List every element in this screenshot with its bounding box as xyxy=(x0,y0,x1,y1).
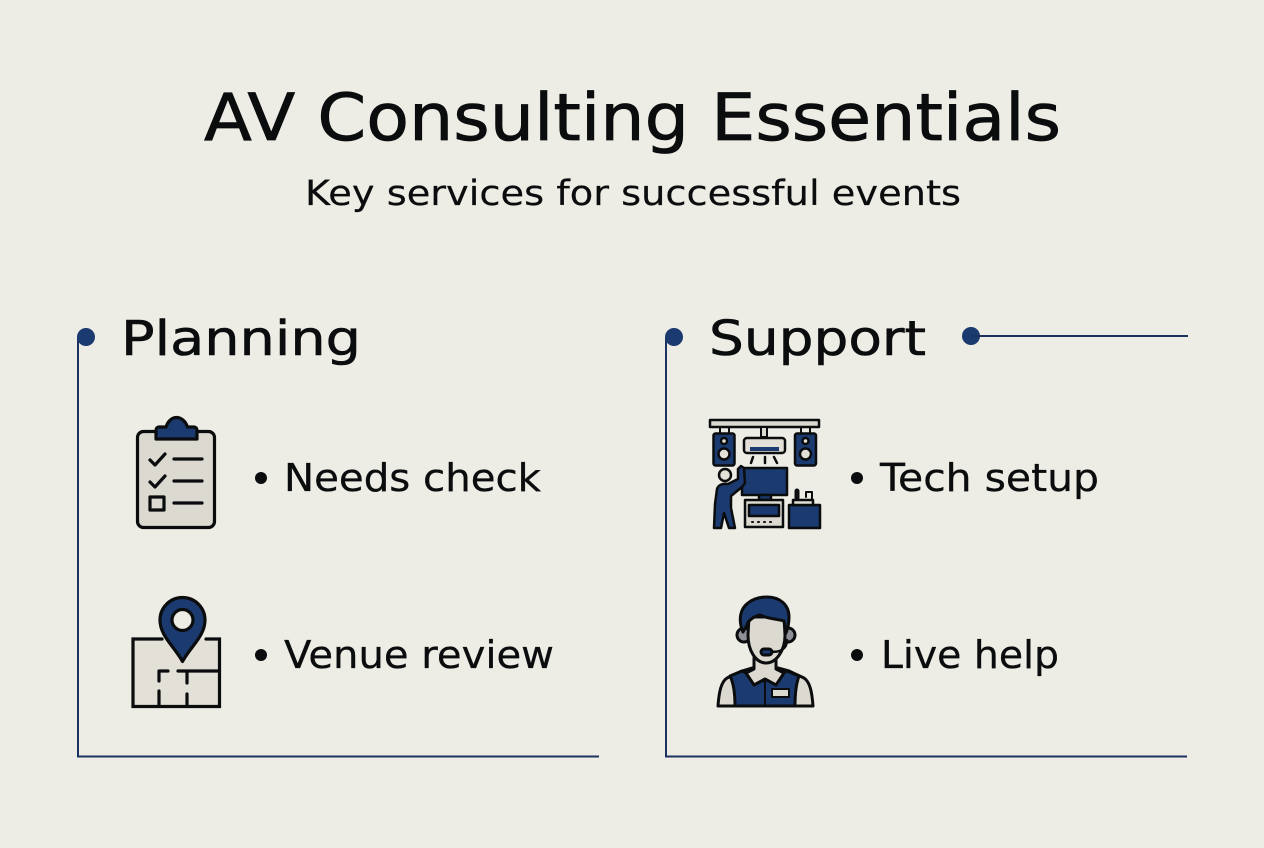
subtitle: Key services for successful events xyxy=(305,174,961,214)
marker dot: planning xyxy=(77,328,95,346)
bullet: venue review xyxy=(255,649,267,661)
bullet: needs check xyxy=(255,472,267,484)
label: needs check: Needs check xyxy=(284,456,541,500)
panel: planning xyxy=(77,311,599,756)
marker dot: support xyxy=(665,328,683,346)
label: live help: Live help xyxy=(881,633,1059,677)
bullet: live help xyxy=(851,649,863,661)
panel: support xyxy=(665,311,1188,756)
icon: tech setup xyxy=(710,420,820,528)
panel frame: support xyxy=(666,337,1187,756)
icon: live help agent xyxy=(718,597,813,706)
connector line with dot xyxy=(962,327,1188,345)
bullet: tech setup xyxy=(851,472,863,484)
label: venue review: Venue review xyxy=(284,633,554,677)
heading: planning: Planning xyxy=(121,311,361,367)
panel frame: planning xyxy=(78,337,599,756)
label: tech setup: Tech setup xyxy=(879,456,1099,500)
title: AV Consulting Essentials xyxy=(204,81,1061,156)
heading: support: Support xyxy=(709,311,926,367)
icon: clipboard checklist xyxy=(138,418,214,528)
icon: venue map pin xyxy=(133,598,220,706)
